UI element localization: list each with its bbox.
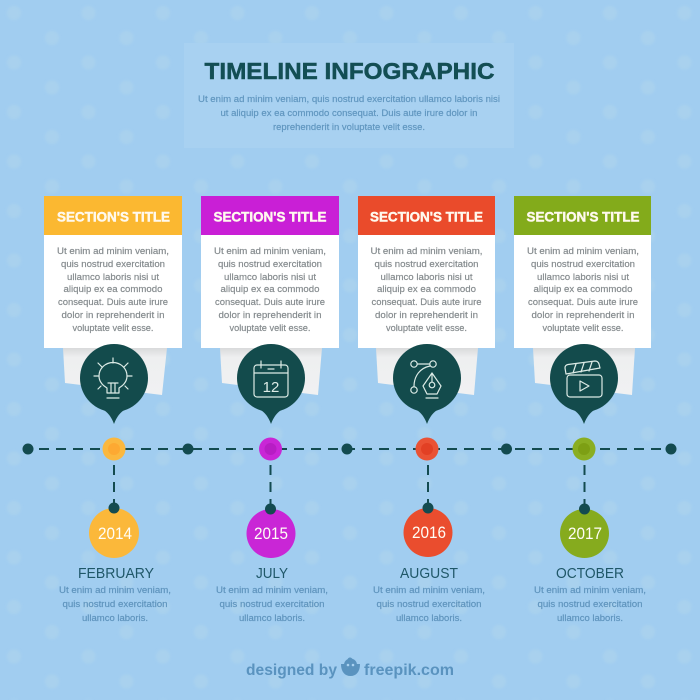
card 2 text: Ut enim ad minim veniam, — [214, 246, 326, 257]
description 2016: ullamco laboris. — [396, 613, 462, 624]
icon: calendar pin — [237, 344, 305, 424]
panel: section card 3 — [358, 196, 495, 395]
month July: JULY — [256, 565, 288, 582]
card 4 text: Ut enim ad minim veniam, — [527, 246, 639, 257]
year badge 2015 — [246, 504, 296, 558]
footer credit — [246, 658, 454, 679]
timeline node dots — [22, 444, 676, 454]
description 2017: Ut enim ad minim veniam, — [534, 585, 646, 596]
month October: OCTOBER — [556, 565, 624, 582]
card 4 text — [527, 246, 639, 334]
panel: section card 2 — [201, 196, 339, 395]
card 3 text: quis nostrud exercitation — [374, 259, 478, 270]
description 2016 — [373, 585, 485, 624]
card 1 text: consequat. Duis aute irure — [58, 297, 168, 308]
column 2016 — [373, 465, 485, 624]
intro text: Ut enim ad minim veniam, quis nostrud exercitation ullamco laboris nisi — [198, 94, 500, 105]
card 1 text: Ut enim ad minim veniam, — [57, 246, 169, 257]
card 1 text: dolor in reprehenderit in — [62, 310, 164, 321]
intro text: ut aliquip ex ea commodo consequat. Duis aute irure dolor in — [220, 108, 478, 119]
year badge 2017: 2017 — [568, 524, 602, 543]
description 2014: quis nostrud exercitation — [62, 599, 168, 610]
column 2015 — [216, 465, 328, 624]
year badge 2016 — [404, 502, 452, 557]
icon: freepik logo — [341, 658, 360, 676]
description 2017: quis nostrud exercitation — [538, 599, 642, 610]
card 3 title bar: SECTION'S TITLE — [370, 210, 483, 224]
card 1 text: aliquip ex ea commodo — [64, 284, 162, 295]
card 2 text: voluptate velit esse. — [230, 323, 310, 334]
card 4 text: ullamco laboris nisi ut — [537, 272, 629, 283]
year badge 2017 — [560, 504, 609, 558]
card 3 text: ullamco laboris nisi ut — [380, 272, 473, 283]
year badge 2015: 2015 — [254, 524, 288, 543]
description 2016: quis nostrud exercitation — [376, 599, 482, 610]
card 2 text: ullamco laboris nisi ut — [224, 272, 316, 283]
card 3 text: aliquip ex ea commodo — [377, 284, 476, 295]
description 2015 — [216, 585, 328, 624]
description 2017 — [534, 585, 646, 624]
card 2 text — [214, 246, 326, 334]
card 2 title bar — [201, 196, 339, 235]
card 4 title bar — [514, 196, 651, 235]
year badge 2014: 2014 — [98, 524, 132, 543]
card 1 title bar: SECTION'S TITLE — [57, 210, 170, 224]
description 2014: Ut enim ad minim veniam, — [59, 585, 171, 596]
column 2017 — [534, 465, 646, 624]
card 2 text: dolor in reprehenderit in — [218, 310, 322, 321]
intro text — [198, 94, 500, 133]
card 3 text: consequat. Duis aute irure — [372, 297, 482, 308]
card 1 text: voluptate velit esse. — [72, 323, 154, 334]
description 2015: ullamco laboris. — [239, 613, 305, 624]
card 4 text: voluptate velit esse. — [542, 323, 624, 334]
card 2 title bar: SECTION'S TITLE — [214, 210, 326, 224]
card 2 text: quis nostrud exercitation — [218, 259, 322, 270]
footer credit: designed by — [246, 662, 337, 679]
icon: light bulb pin — [80, 344, 148, 424]
description 2015: quis nostrud exercitation — [220, 599, 324, 610]
title: TIMELINE INFOGRAPHIC — [204, 58, 495, 84]
card 3 title bar — [358, 196, 495, 235]
timeline axis — [22, 438, 676, 460]
card 1 text: quis nostrud exercitation — [61, 259, 165, 270]
card 4 text: quis nostrud exercitation — [531, 259, 635, 270]
panel: section card 4 — [514, 196, 651, 395]
marker 2017 — [572, 438, 596, 460]
description 2014 — [59, 585, 171, 624]
intro text: reprehenderit in voluptate velit esse. — [273, 122, 425, 133]
card 1 title bar — [44, 196, 182, 235]
card 3 text: voluptate velit esse. — [386, 323, 467, 334]
card 3 text: Ut enim ad minim veniam, — [370, 246, 482, 257]
card 4 text: dolor in reprehenderit in — [532, 310, 634, 321]
card 4 text: consequat. Duis aute irure — [528, 297, 638, 308]
card 3 text — [370, 246, 482, 334]
year badge 2016: 2016 — [412, 523, 446, 542]
month August: AUGUST — [400, 565, 458, 582]
card 2 text: consequat. Duis aute irure — [215, 297, 325, 308]
card 3 text: dolor in reprehenderit in — [375, 310, 478, 321]
card 2 text: aliquip ex ea commodo — [220, 284, 320, 295]
card 4 text: aliquip ex ea commodo — [534, 284, 632, 295]
card 1 text: ullamco laboris nisi ut — [67, 272, 159, 283]
description 2017: ullamco laboris. — [557, 613, 623, 624]
card 1 text — [57, 246, 169, 334]
footer credit: freepik.com — [364, 662, 454, 679]
description 2014: ullamco laboris. — [82, 613, 148, 624]
description 2015: Ut enim ad minim veniam, — [216, 585, 328, 596]
icon: pen tool pin — [393, 344, 461, 424]
icon: calendar pin: 12 — [263, 379, 279, 396]
marker 2014 — [102, 438, 126, 460]
month February: FEBRUARY — [78, 565, 154, 582]
panel: section card 1 — [44, 196, 182, 395]
column 2014 — [59, 465, 171, 624]
card 4 title bar: SECTION'S TITLE — [526, 210, 640, 224]
year badge 2014 — [89, 502, 139, 558]
marker 2015 — [259, 438, 282, 460]
marker 2016 — [416, 438, 438, 460]
panel: header — [184, 43, 514, 148]
icon: clapperboard pin — [550, 344, 618, 424]
description 2016: Ut enim ad minim veniam, — [373, 585, 485, 596]
